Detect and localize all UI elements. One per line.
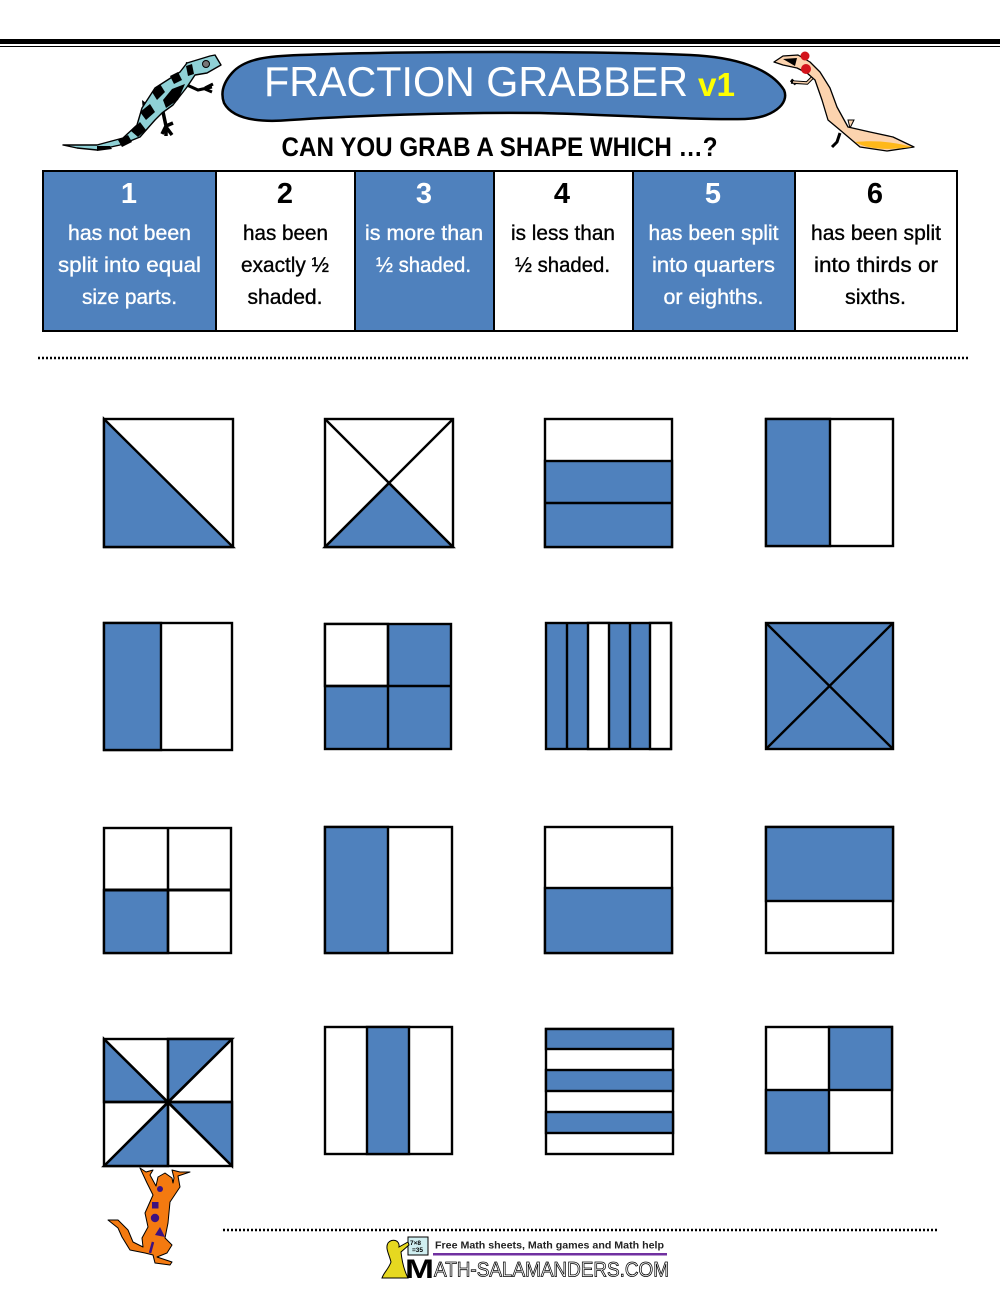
criterion 2: shaded. [248,286,322,309]
criterion 1: has not been [68,222,191,245]
criterion 6: sixths. [845,286,906,309]
criterion 6: 6 [867,178,883,210]
criterion 5 [648,178,779,309]
logo mascot [382,1240,409,1278]
footer logo: =35 [412,1247,423,1254]
criterion 1: split into equal [58,254,201,277]
criterion 6: has been split [811,222,941,245]
criterion 4: 4 [554,178,570,210]
shape 8: fully shaded square [766,623,893,749]
criterion 4: is less than [511,222,615,245]
version label: v1 [698,66,735,103]
shape 10: left half [325,827,452,953]
shape 4: left half [766,419,893,546]
criterion 3: 3 [416,178,432,210]
shape 12: upper part [766,827,893,953]
criterion 1 [58,178,201,309]
shape 6: three quarters [325,624,451,749]
footer logo [382,1237,669,1284]
shape 11: lower part [545,827,672,953]
title text: FRACTION GRABBER [264,58,688,105]
title banner [222,52,785,121]
criterion 2: has been [243,222,328,245]
criterion 1: 1 [121,178,137,210]
criterion 5: has been split [648,222,779,245]
criterion 5: into quarters [652,254,775,277]
shape 1: diagonal half [104,419,233,547]
criterion 5: or eighths. [664,286,764,309]
logo chalkboard [408,1237,428,1255]
subtitle: CAN YOU GRAB A SHAPE WHICH …? [282,132,718,162]
shape 7: six vertical strips [546,623,671,749]
logo tagline: Free Math sheets, Math games and Math help [435,1240,664,1252]
criterion 3 [365,178,483,277]
criterion 3: ½ shaded. [376,254,471,277]
shape 2: quarter triangle [325,419,453,547]
shape 9: one quarter [104,828,231,953]
criterion 4: ½ shaded. [515,254,610,277]
criterion 2 [241,178,329,309]
shape 13: eight wedges [104,1039,232,1166]
icon: orange spotted salamander [108,1168,190,1265]
criterion 5: 5 [705,178,721,210]
criterion 1: size parts. [82,286,177,309]
icon: orange salamander [774,52,914,151]
shape 16: two quarters [766,1027,892,1153]
criterion 2: exactly ½ [241,254,329,277]
shape 14: middle strip [325,1027,452,1154]
footer logo: 7×8 [410,1240,421,1247]
criterion 2: 2 [277,178,293,210]
criteria table [43,171,957,331]
logo wordmark: ATH-SALAMANDERS.COM [434,1258,669,1282]
icon: blue checkered salamander [63,55,221,151]
criterion 3: is more than [365,222,483,245]
shape 3: two of three bars [545,419,672,547]
criterion 4 [511,178,615,277]
shape 5: left unequal part [104,623,232,750]
criterion 6: into thirds or [814,254,938,277]
criterion 6 [811,178,941,309]
logo big M: M [405,1254,434,1284]
shape 15: six horizontal strips [546,1029,673,1154]
